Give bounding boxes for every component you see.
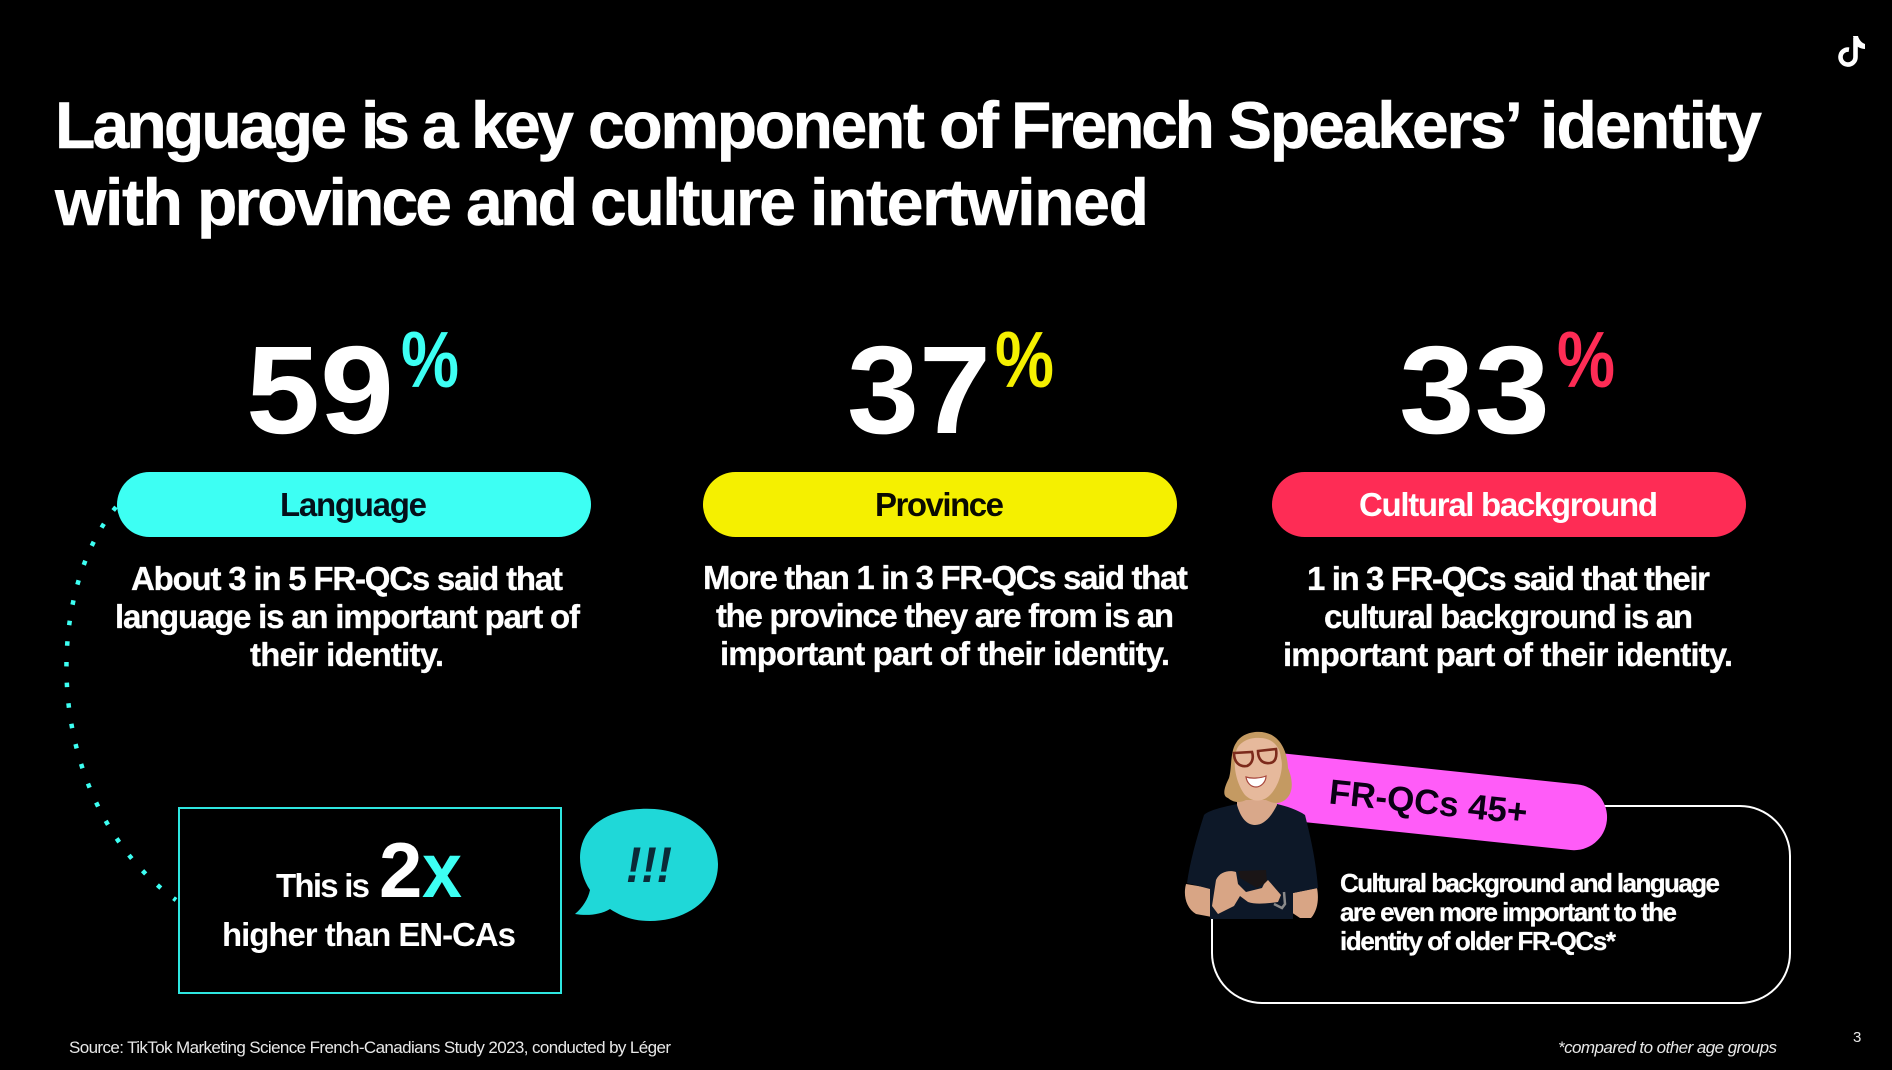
title: Language [55,88,347,162]
text block: language description [115,560,581,673]
shirt [1187,804,1318,919]
title: and [466,165,578,239]
text block: cultural description: 1 in 3 FR-QCs said that their [1307,560,1710,597]
stat: 37 percent: 37 [847,321,991,460]
title: Speakers’ [1228,88,1523,162]
hands [1212,871,1281,914]
text block: cultural description: important part of their identity. [1283,636,1733,673]
mouth [1246,776,1266,787]
panel: cultural background [1272,315,1746,673]
title: intertwined [810,165,1149,239]
stat: 37 percent [847,315,1054,460]
right forearm [1272,888,1318,918]
text block: province description [703,559,1188,672]
title: component [588,88,925,162]
stat: 37 percent: % [995,315,1054,404]
text block: older FR-QCs [1340,868,1720,956]
photo: woman holding phone [1185,732,1318,919]
text block: older FR-QCs: Cultural background and language [1340,868,1720,898]
pill: Province: Province [875,486,1004,523]
callout: 2x higher: higher than EN-CAs [222,916,516,953]
text block: province description: More than 1 in 3 FR-QCs said that [703,559,1188,596]
face [1235,738,1282,801]
text block: cultural description: cultural background is an [1324,598,1693,635]
panel: language [115,315,591,673]
rounded outline box [1212,806,1790,1003]
panel: FR-QCs 45+ [1185,732,1790,1003]
pill: Language [117,472,591,537]
text block: cultural description [1283,560,1733,673]
icon: speech bubble [575,809,718,921]
glasses [1234,749,1276,766]
title: with [54,165,183,239]
stat: 33 percent: 33 [1399,321,1550,460]
title: a [422,88,460,162]
title: French [1011,88,1215,162]
text block: older FR-QCs: are even more important to the [1340,897,1677,927]
text block: older FR-QCs: identity of older FR-QCs* [1340,926,1617,956]
icon: TikTok logo [1841,36,1865,65]
pill: Cultural background: Cultural background [1359,486,1658,523]
dotted connector arrow [66,507,176,900]
icon: speech bubble: !!! [626,837,672,893]
tag: FR-QCs 45+: FR-QCs 45+ [1327,773,1529,832]
callout: 2x higher: 2 [379,826,422,914]
title: province [197,165,452,239]
title [54,88,1762,239]
title: is [361,88,410,162]
title: of [939,88,1000,162]
text block: province description: the province they are from is an [716,597,1174,634]
text block: language description: language is an important part of [115,598,581,635]
watch [1274,892,1285,908]
tag: FR-QCs 45+ [1237,749,1610,853]
pill: Province [703,472,1177,537]
neck [1237,792,1277,825]
pill: Language: Language [280,486,427,523]
panel: province [703,315,1188,672]
stat: 59 percent: % [401,315,459,404]
title: culture [590,165,796,239]
title: identity [1540,88,1762,162]
phone [1238,870,1267,888]
stat: 59 percent [246,315,459,460]
callout: 2x higher: x [422,826,462,914]
source note: Source: TikTok Marketing Science French-Canadians Study 2023, conducted by Léger [69,1038,671,1057]
text block: language description: About 3 in 5 FR-QCs said that [131,560,563,597]
left forearm [1185,884,1238,917]
page number: 3 [1853,1029,1861,1046]
pill: Cultural background [1272,472,1746,537]
text block: language description: their identity. [250,636,444,673]
text block: province description: important part of their identity. [720,635,1170,672]
stat: 33 percent [1399,315,1615,460]
callout: 2x higher: This is [276,867,370,904]
footnote: *compared to other age groups [1558,1038,1778,1057]
hair [1224,732,1292,803]
stat: 59 percent: 59 [246,321,394,460]
stat: 33 percent: % [1557,315,1615,404]
title: key [471,88,574,162]
callout: 2x higher [179,808,561,993]
